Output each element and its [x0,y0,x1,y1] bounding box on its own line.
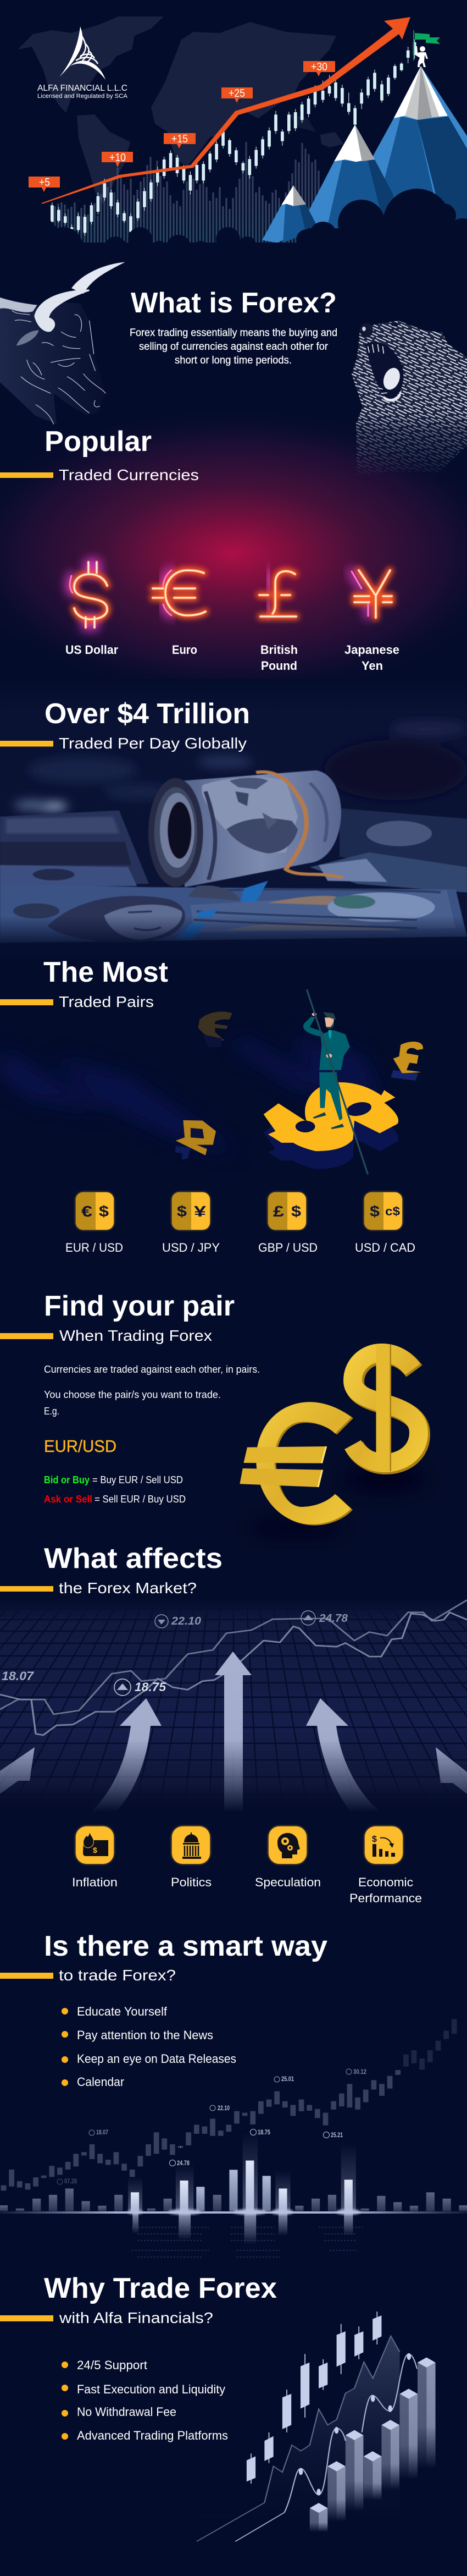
price labels: 18.07 [96,2128,108,2136]
currency labels: Yen [362,659,383,673]
pair icon: EUR USD: $ [99,1203,109,1220]
heading: The Most [0,956,168,1010]
euro coin [198,1011,232,1041]
illustration: gold currency symbols [240,1345,429,1538]
background streaks [0,1034,385,1155]
glow streaks [128,2133,356,2244]
price labels: 25.21 [331,2131,343,2139]
pair labels [65,1241,415,1254]
price labels: 25.01 [281,2075,294,2083]
isometric bars [310,2357,436,2532]
chart: isometric growth chart [197,2311,436,2541]
list: smart way tips [62,2005,236,2089]
tag 24.78: 24.78 [319,1612,348,1625]
pair icon: USD JPY: $ [177,1203,187,1220]
heading: The Most: The Most [43,956,168,988]
illustration: trader on dollar [175,989,423,1174]
list: smart way tips: Pay attention to the News [77,2028,213,2042]
gold euro sign [240,1402,353,1526]
panel: money photo [0,679,467,965]
currency labels: British [260,643,298,657]
logo [37,26,128,100]
heading: Popular: Traded Currencies [59,466,199,483]
heading: What affects: the Forex Market? [59,1579,197,1597]
callout values: +5 [39,177,50,189]
pole [307,989,368,1174]
currency labels: Pound [261,659,297,673]
list: smart way tips: Keep an eye on Data Releases [77,2052,236,2066]
pair icon: USD JPY: ¥ [194,1203,207,1220]
heading: What affects: What affects [44,1543,223,1575]
world map [18,16,343,205]
mountain: small [262,185,316,243]
price labels: 07.28 [64,2177,77,2185]
price labels [57,2068,366,2185]
pair example: EUR/USD [44,1436,116,1456]
text block: pairs explanation [44,1364,260,1417]
text block: pairs explanation: You choose the pair/s you want to trade. [44,1389,221,1400]
price labels: 30.12 [353,2068,366,2076]
factor labels: Speculation [255,1875,321,1889]
glow baseline [0,2211,467,2214]
blurred background [14,721,467,811]
candlesticks [52,40,415,235]
price labels: 22.10 [218,2104,230,2112]
portrait [202,777,298,854]
illustration: bull [0,262,125,424]
text block: definition: selling of currencies against each other for [139,341,329,353]
currency labels [65,643,399,673]
list: reasons: 24/5 Support [77,2358,147,2372]
factor labels: Inflation [72,1875,118,1889]
icon: inflation [76,1826,114,1864]
mountains [262,66,467,243]
factor labels: Economic [358,1875,413,1889]
pair icon: USD CAD: c$ [385,1204,400,1218]
heading: Over $4 Trillion: Over $4 Trillion [45,698,250,730]
callouts [29,61,335,192]
pound coin [391,1042,423,1081]
icon: neon pound [259,571,296,617]
factor labels: Politics [171,1875,212,1889]
pair labels: GBP / USD [258,1241,318,1254]
chart: smart way candles and bars [0,2019,467,2257]
area line [197,2336,399,2541]
panel: factor icons [76,1826,403,1864]
bid and ask lines [44,1474,186,1505]
gold dollar sign [353,1345,420,1471]
heading: Why Trade Forex: Why Trade Forex [44,2272,277,2304]
flag and climber [414,30,440,67]
heading: Why Trade Forex: with Alfa Financials? [59,2309,213,2326]
pair icon: GBP USD: £ [273,1203,285,1220]
heading: Find your pair [0,1290,235,1344]
company name: ALFA FINANCIAL L.L.C [37,84,127,93]
panel: hero header [0,16,467,269]
heading: Find your pair: When Trading Forex [59,1327,212,1344]
icon: neon yen [352,570,392,618]
bid and ask lines: = Buy EUR / Sell USD [92,1474,183,1485]
text block: definition: short or long time periods. [175,355,292,366]
pair labels: EUR / USD [65,1241,123,1254]
panel: red glow [0,405,467,702]
panel: traded pair icons [76,1192,402,1230]
icon: speculation [269,1826,307,1864]
price tags [2,1611,348,1696]
heading: Over $4 Trillion [0,698,250,752]
callout values: +25 [229,87,245,100]
dollar roll [148,770,342,887]
icon: politics [172,1826,210,1864]
pair icon: GBP USD [268,1192,306,1230]
candles [251,2311,377,2484]
currency labels: US Dollar [65,643,118,657]
mountain: large [327,66,467,238]
bills [0,808,467,943]
tag 22.10: 22.10 [171,1615,201,1627]
heading: Popular [0,426,199,483]
icon: economic performance: $ [372,1835,377,1844]
currency labels: Japanese [344,643,399,657]
factor labels: Performance [349,1891,422,1905]
text block: definition [130,327,337,366]
pair labels: USD / CAD [355,1241,415,1254]
chart: market grid [0,1598,467,1815]
heading: smart way [0,1930,327,1984]
trader [303,1012,350,1129]
callout values: +15 [171,133,188,145]
heading: The Most: Traded Pairs [59,993,154,1010]
pair icon: USD CAD: $ [370,1203,380,1220]
volume bars [55,142,319,245]
heading: Find your pair: Find your pair [44,1290,235,1322]
icon: neon dollar [70,562,107,628]
bid and ask lines: Bid or Buy [44,1474,90,1485]
tag 22.10 [155,1615,201,1628]
currency labels: Euro [172,643,197,657]
pair icon: GBP USD: $ [291,1203,301,1220]
growth arrow [42,17,410,204]
reflection digits [132,2227,363,2257]
icon: neon euro [153,570,205,615]
price lines [0,1600,467,1735]
price labels: 24.78 [177,2159,190,2167]
list: smart way tips: Educate Yourself [77,2005,168,2018]
list: reasons [62,2358,228,2442]
heading: smart way: Is there a smart way [44,1930,327,1962]
callout values: +30 [311,61,327,73]
bear muzzle and mouth [360,323,403,401]
list: reasons: No Withdrawal Fee [77,2405,176,2419]
bid and ask lines: = Sell EUR / Buy USD [94,1494,186,1505]
curve line [235,2354,417,2541]
illustration: bear [352,321,467,478]
heading: Over $4 Trillion: Traded Per Day Globally [59,735,247,752]
text block: pairs explanation: E.g. [44,1406,59,1417]
tag 24.78 [301,1611,348,1625]
end of roll [148,778,203,887]
icon: inflation: $ [93,1846,97,1854]
list: smart way tips: Calendar [77,2075,124,2089]
text block: pairs explanation: Currencies are traded against each other, in pairs. [44,1364,260,1375]
icon: economic performance [365,1826,403,1864]
lower bars [0,2161,467,2211]
pair labels: USD / JPY [162,1241,220,1254]
callout values: +10 [109,152,126,164]
price labels: 18.75 [258,2128,270,2136]
pair icon: EUR USD: € [81,1203,93,1220]
heading: Why Trade Forex [0,2272,277,2326]
license line: Licensed and Regulated by SCA [37,93,128,100]
pair icon: USD CAD [364,1192,402,1230]
clouds [0,189,467,269]
logo mark [59,26,105,80]
factor labels [72,1875,422,1905]
mountain: medium [307,125,396,238]
pair icon: EUR USD [76,1192,114,1230]
title: What is Forex: What is Forex? [131,287,337,319]
text block: definition: Forex trading essentially means the buying and [130,327,337,339]
callout values [39,61,327,189]
faint candles [4,2019,454,2190]
arrows [0,1652,467,1814]
heading: smart way: to trade Forex? [59,1967,176,1984]
heading: What affects [0,1543,223,1597]
string [256,772,342,878]
tag 18.75 [114,1679,166,1696]
heading: Popular: Popular [45,426,152,458]
bid and ask lines: Ask or Sell [44,1494,92,1505]
tag 18.75: 18.75 [135,1680,166,1694]
gold dollar [264,1082,398,1151]
pair icon: USD JPY [172,1192,210,1230]
dollar shadow [264,1100,398,1169]
ruble coin [175,1120,216,1159]
list: reasons: Advanced Trading Platforms [77,2429,228,2442]
tag 18.07: 18.07 [2,1669,35,1683]
list: reasons: Fast Execution and Liquidity [77,2382,225,2396]
